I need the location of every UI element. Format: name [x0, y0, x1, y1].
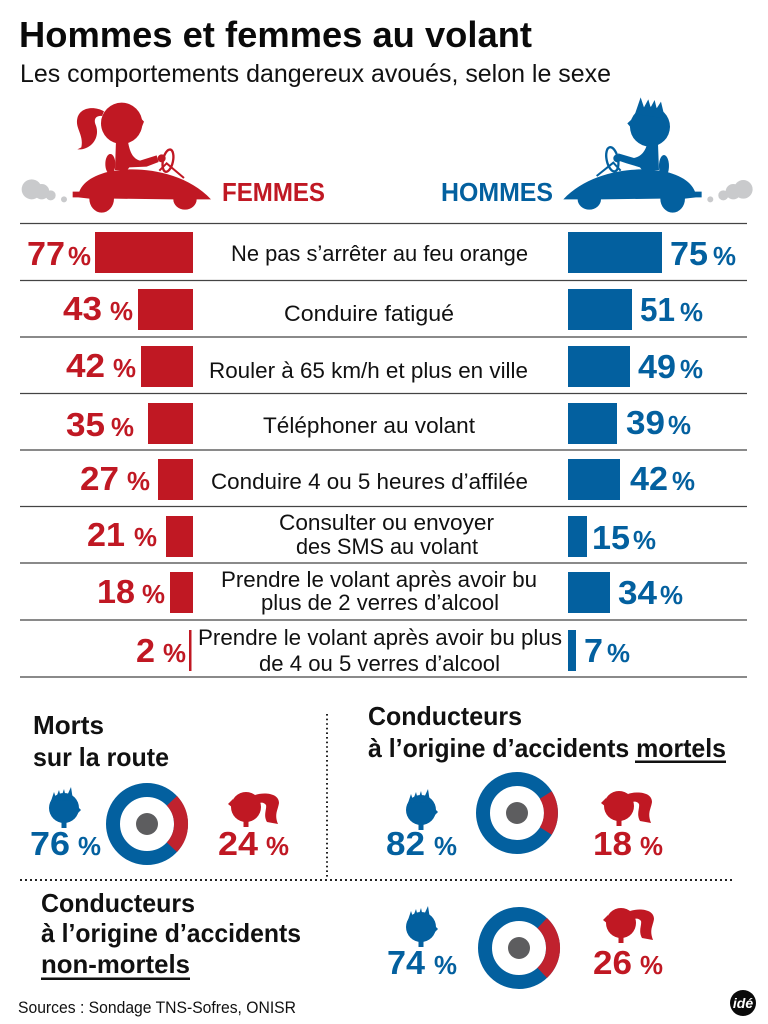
row: 4 ou 5 heures	[80, 459, 695, 500]
row: 65 km/h: 42	[66, 347, 105, 384]
row: feu orange: Ne pas s’arrêter au feu orange	[231, 241, 528, 266]
row: 65 km/h: 49	[638, 348, 676, 385]
heading: Morts	[33, 710, 104, 740]
icon: girl head	[603, 908, 654, 943]
row: conduire fatigué: Conduire fatigué	[284, 301, 454, 326]
row: SMS: Consulter ou envoyer	[279, 510, 494, 535]
row: conduire fatigué: 43	[63, 290, 102, 327]
value: hommes: %	[78, 831, 101, 861]
value: hommes	[30, 825, 101, 862]
icon: man driving blue car	[563, 97, 753, 213]
row: 2 verres: %	[142, 579, 165, 609]
row: 4 ou 5 verres: 7	[584, 632, 603, 669]
heading: sur la route	[33, 742, 169, 772]
panel: accidents non-mortels	[41, 888, 663, 982]
icon: boy head	[49, 787, 81, 828]
icon: boy head	[406, 906, 438, 947]
value: femmes: 18	[593, 825, 632, 862]
heading	[41, 888, 301, 980]
logo: idé	[730, 990, 756, 1016]
heading: Conducteurs	[368, 701, 522, 731]
logo: idé: idé	[733, 995, 753, 1011]
value: femmes	[593, 825, 663, 862]
row: conduire fatigué: 51	[640, 291, 675, 328]
title: Hommes et femmes au volant	[19, 14, 532, 55]
row: conduire fatigué	[63, 289, 703, 330]
heading: Conducteurs	[41, 888, 195, 918]
row: téléphoner: %	[668, 410, 691, 440]
row: 65 km/h	[66, 346, 703, 387]
icon: woman driving red car	[22, 103, 211, 213]
row: 4 ou 5 verres: %	[607, 638, 630, 668]
row: 65 km/h: %	[113, 353, 136, 383]
row: 4 ou 5 verres: de 4 ou 5 verres d’alcool	[259, 651, 500, 676]
row: téléphoner: %	[111, 412, 134, 442]
panel: accidents mortels	[368, 701, 726, 862]
row: feu orange: 77	[27, 235, 65, 272]
value: hommes: 82	[386, 825, 425, 862]
row: 4 ou 5 heures: %	[127, 466, 150, 496]
heading: à l’origine d’accidents	[41, 918, 301, 948]
row: téléphoner: 39	[626, 404, 665, 441]
row: 4 ou 5 verres: Prendre le volant après avoir bu plus	[198, 625, 562, 650]
value: hommes: 76	[30, 825, 70, 862]
row: 65 km/h: %	[680, 354, 703, 384]
panel: morts sur la route	[30, 710, 289, 862]
row: 4 ou 5 heures: 27	[80, 460, 119, 497]
row: 2 verres: 18	[97, 573, 135, 610]
row: 65 km/h: Rouler à 65 km/h et plus en ville	[209, 358, 528, 383]
row: 2 verres: 34	[618, 574, 658, 611]
subtitle: Les comportements dangereux avoués, selon le sexe	[20, 60, 611, 88]
row: 4 ou 5 heures: Conduire 4 ou 5 heures d’affilée	[211, 469, 528, 494]
value: femmes: %	[640, 950, 663, 980]
value: femmes	[218, 825, 289, 862]
row: conduire fatigué: %	[680, 297, 703, 327]
row: 2 verres: Prendre le volant après avoir bu	[221, 567, 537, 592]
row: téléphoner: Téléphoner au volant	[263, 413, 475, 438]
donut chart	[113, 790, 181, 858]
row: SMS: des SMS au volant	[296, 534, 478, 559]
icon: girl head	[228, 792, 279, 827]
donut chart	[485, 914, 553, 982]
row: SMS: %	[134, 522, 157, 552]
icon: boy head	[406, 789, 438, 830]
icon: girl head	[601, 791, 652, 826]
row: téléphoner: 35	[66, 406, 105, 443]
row: 4 ou 5 heures: 42	[630, 460, 668, 497]
value: femmes: %	[266, 831, 289, 861]
row: téléphoner	[66, 403, 691, 444]
row: feu orange: %	[713, 241, 736, 271]
value: hommes: 74	[387, 944, 426, 981]
label: hommes: HOMMES	[441, 177, 553, 207]
value: hommes	[386, 825, 457, 862]
row: SMS: 21	[87, 516, 125, 553]
row: 2 verres	[97, 567, 683, 615]
row: 4 ou 5 verres: 2	[136, 632, 155, 669]
heading: non-mortels	[41, 949, 190, 979]
row: SMS: %	[633, 525, 656, 555]
row: feu orange: 75	[670, 235, 708, 272]
row: 2 verres: plus de 2 verres d’alcool	[261, 590, 499, 615]
sources: Sources : Sondage TNS-Sofres, ONISR	[18, 998, 296, 1017]
value: femmes: 26	[593, 944, 632, 981]
value: femmes: 24	[218, 825, 259, 862]
heading: à l’origine d’accidents mortels	[368, 733, 726, 763]
value: femmes	[593, 944, 663, 981]
heading	[368, 701, 726, 763]
row: feu orange: %	[68, 241, 91, 271]
row: 4 ou 5 heures: %	[672, 466, 695, 496]
value: hommes	[387, 944, 457, 981]
value: hommes: %	[434, 950, 457, 980]
value: hommes: %	[434, 831, 457, 861]
row: 2 verres: %	[660, 580, 683, 610]
row: feu orange	[27, 232, 736, 273]
label: femmes: FEMMES	[222, 177, 325, 207]
row: 4 ou 5 verres	[136, 625, 630, 676]
row: 4 ou 5 verres: %	[163, 638, 186, 668]
heading	[33, 710, 169, 772]
row: SMS: 15	[592, 519, 630, 556]
row: conduire fatigué: %	[110, 296, 133, 326]
row: SMS	[87, 510, 656, 559]
donut chart	[483, 779, 551, 847]
value: femmes: %	[640, 831, 663, 861]
